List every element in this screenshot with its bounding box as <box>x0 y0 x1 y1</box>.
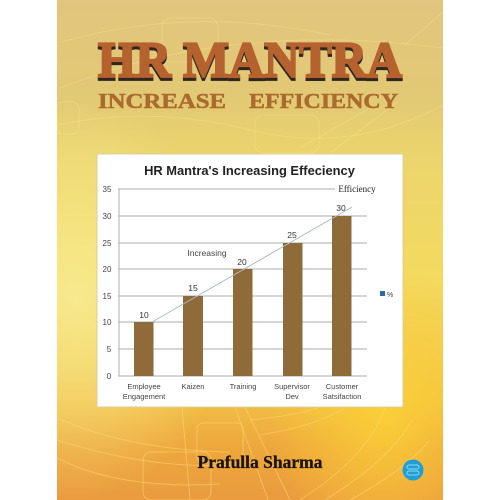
bar chart: 15 <box>188 283 198 293</box>
bar chart: 20 <box>237 257 247 267</box>
author name: Prafulla Sharma <box>198 452 323 472</box>
panel: chart card <box>97 154 403 407</box>
bar chart: 10 <box>139 310 149 320</box>
bar chart <box>103 185 367 401</box>
bar chart: 0 <box>107 372 112 381</box>
bar chart: Satsifaction <box>323 392 361 401</box>
subtitle: increase efficiency: EFFICIENCY <box>249 89 398 113</box>
bar chart: Supervisor <box>274 382 310 391</box>
subtitle: increase efficiency: INCREASE <box>98 89 226 113</box>
icon: publisher badge <box>402 460 424 480</box>
bar chart: 10 <box>103 318 112 327</box>
label: efficiency: Efficiency <box>338 184 376 194</box>
label: increasing: Increasing <box>187 248 227 258</box>
bar chart: Employee <box>127 382 161 391</box>
bar chart: 25 <box>103 239 112 248</box>
subtitle: increase efficiency <box>98 89 398 113</box>
chart heading: HR Mantra's Increasing Effeciency <box>144 163 356 178</box>
bar chart: 25 <box>287 230 297 240</box>
legend: % <box>387 292 393 299</box>
bar chart: Customer <box>326 382 359 391</box>
legend <box>380 291 393 299</box>
bar chart: Kaizen <box>182 382 204 391</box>
arrow: increasing trend line <box>152 207 352 322</box>
bar chart: Engagement <box>123 392 166 401</box>
title: HR MANTRA: HR MANTRA <box>98 33 402 89</box>
bar chart: 20 <box>103 265 112 274</box>
bar chart: 30 <box>336 203 346 213</box>
bar chart: 5 <box>107 345 112 354</box>
panel: book cover background <box>57 0 443 500</box>
bar chart: Training <box>230 382 256 391</box>
bar chart: Dev <box>285 392 299 401</box>
bar chart: 35 <box>103 185 112 194</box>
bar chart: 15 <box>103 292 112 301</box>
title: HR MANTRA: HR MANTRA <box>98 36 402 92</box>
bar chart: 30 <box>103 212 112 221</box>
